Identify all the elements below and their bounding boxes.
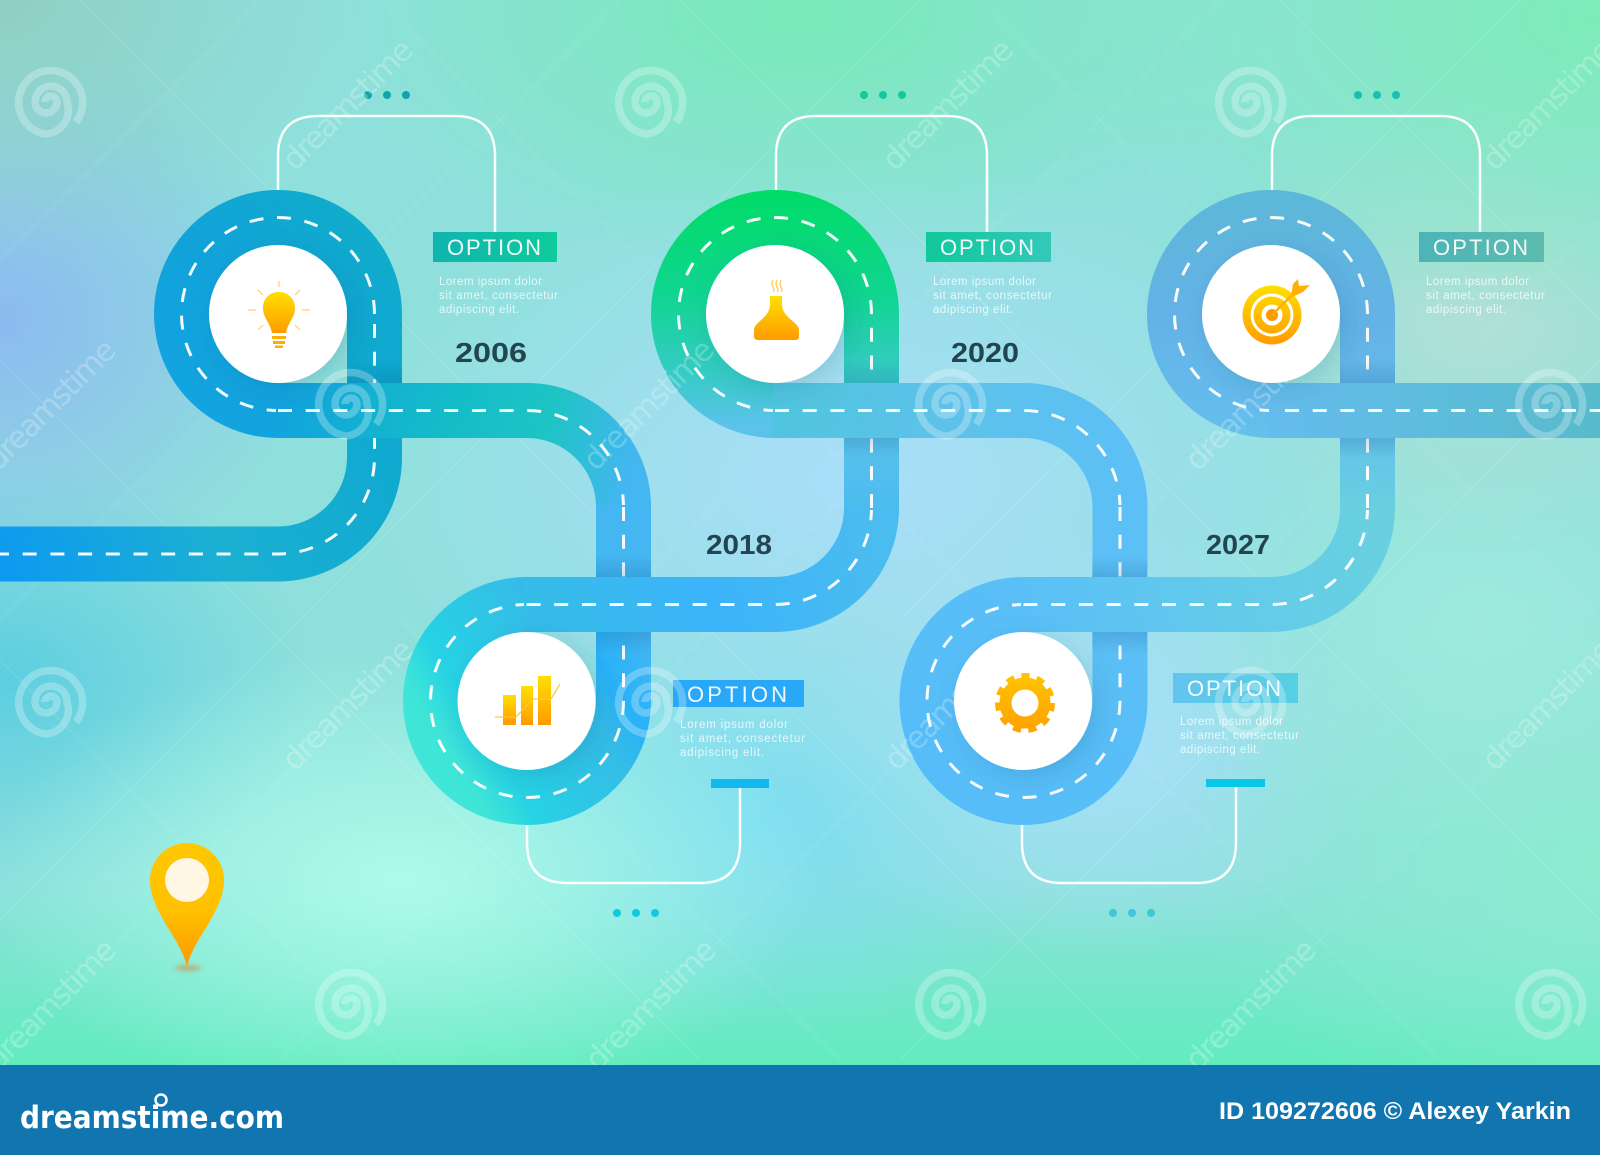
icon: target with arrow xyxy=(1242,279,1310,344)
watermark text: dreamstime xyxy=(275,32,421,178)
step 3 label xyxy=(776,91,1052,368)
description 2: sit amet, consectetur xyxy=(680,733,805,745)
option text 1: OPTION xyxy=(447,235,541,260)
description 5: sit amet, consectetur xyxy=(1426,290,1545,302)
option text 2: OPTION xyxy=(687,682,787,707)
road segment: loop 5 to right edge xyxy=(1269,383,1600,438)
description 1: Lorem ipsum dolor xyxy=(439,276,542,288)
road loop 1 xyxy=(181,217,374,410)
description 1 xyxy=(439,276,558,316)
description 3 xyxy=(933,276,1052,316)
description 3: sit amet, consectetur xyxy=(933,290,1052,302)
description 5 xyxy=(1426,276,1545,316)
description 3: Lorem ipsum dolor xyxy=(933,276,1036,288)
watermark text: dreamstime xyxy=(1178,932,1324,1078)
watermark text: dreamstime xyxy=(578,932,724,1078)
year 2018: 2018 xyxy=(706,529,772,560)
footer logo spiral xyxy=(156,1094,166,1106)
road loop 4 xyxy=(927,505,1120,797)
option box 4 xyxy=(1173,673,1298,703)
description 5: Lorem ipsum dolor xyxy=(1426,276,1529,288)
accent bar 4 xyxy=(1206,779,1265,787)
road loop 5 xyxy=(1174,217,1368,510)
connector 1 xyxy=(278,116,495,232)
option box 5 xyxy=(1419,232,1544,262)
road segment: loop 2 to loop 3 xyxy=(524,500,872,604)
connector 3 xyxy=(776,116,987,232)
road segment: start to first loop xyxy=(0,314,374,554)
white circle 3 xyxy=(706,245,844,383)
description 4: Lorem ipsum dolor xyxy=(1180,716,1283,728)
watermark text: dreamstime xyxy=(877,632,1023,778)
option box 3 xyxy=(926,232,1051,262)
description 1: sit amet, consectetur xyxy=(439,290,558,302)
step 5: target circle xyxy=(1202,245,1340,383)
crossing shadow 4 xyxy=(1092,632,1147,655)
dots 1 xyxy=(364,91,410,99)
connector 2 xyxy=(527,788,740,883)
road segment: loop 1 to loop 2 xyxy=(276,410,624,520)
connector 5 xyxy=(1272,116,1480,232)
step 5 label xyxy=(1272,91,1545,316)
white circle 4 xyxy=(954,632,1092,770)
white circle 5 xyxy=(1202,245,1340,383)
option box 1 xyxy=(433,232,557,262)
accent bar 2 xyxy=(711,779,769,788)
road loop 3 xyxy=(678,217,872,510)
year 2020: 2020 xyxy=(951,337,1019,368)
road: full winding route xyxy=(0,217,1600,797)
dots 4 xyxy=(1109,909,1155,917)
watermark text: dreamstime xyxy=(1178,332,1324,478)
option box 2 xyxy=(673,680,804,707)
crossing shadow 1 xyxy=(347,360,402,383)
description 5: adipiscing elit. xyxy=(1426,304,1506,316)
watermark text: dreamstime xyxy=(275,632,421,778)
option text 3: OPTION xyxy=(940,235,1034,260)
crossing shadow 2 xyxy=(596,632,651,655)
icon: gear xyxy=(998,676,1052,730)
icon: location pin xyxy=(150,843,224,971)
road loop 2 xyxy=(430,505,624,797)
dots 2 xyxy=(613,909,659,917)
road segment: loop 3 to loop 4 xyxy=(773,410,1120,520)
footer bar xyxy=(0,1065,1600,1155)
step 4: gear circle xyxy=(954,632,1092,770)
description 1: adipiscing elit. xyxy=(439,304,519,316)
description 2: Lorem ipsum dolor xyxy=(680,719,788,731)
step 3: flask circle xyxy=(706,245,844,383)
dots 3 xyxy=(860,91,906,99)
icon: light bulb xyxy=(248,281,310,348)
description 4: adipiscing elit. xyxy=(1180,744,1260,756)
connector 4 xyxy=(1022,787,1236,883)
watermark text: dreamstime xyxy=(576,332,722,478)
icon: flask xyxy=(754,280,799,340)
year 2006: 2006 xyxy=(455,337,527,368)
description 2 xyxy=(680,719,805,759)
footer credit: ID 109272606 © Alexey Yarkin xyxy=(1219,1098,1571,1125)
crossing shadow 5 xyxy=(1340,360,1395,383)
crossing shadow 3 xyxy=(844,360,899,383)
option text 4: OPTION xyxy=(1187,676,1281,701)
footer logo text: dreamstime.com xyxy=(20,1100,284,1136)
step 2: chart circle xyxy=(458,632,596,770)
road segment: loop 4 to loop 5 xyxy=(1021,500,1368,604)
description 4 xyxy=(1180,716,1299,756)
step 1 label xyxy=(278,91,558,368)
year 2027: 2027 xyxy=(1206,529,1270,560)
step 2 label xyxy=(527,529,805,917)
description 2: adipiscing elit. xyxy=(680,747,764,759)
watermark text: dreamstime xyxy=(875,32,1021,178)
white circle 1 xyxy=(209,245,347,383)
dots 5 xyxy=(1354,91,1400,99)
option text 5: OPTION xyxy=(1433,235,1528,260)
step 1: bulb circle xyxy=(209,245,347,383)
description 3: adipiscing elit. xyxy=(933,304,1013,316)
white circle 2 xyxy=(458,632,596,770)
icon: bar chart xyxy=(495,676,560,725)
description 4: sit amet, consectetur xyxy=(1180,730,1299,742)
step 4 label xyxy=(1022,529,1299,917)
